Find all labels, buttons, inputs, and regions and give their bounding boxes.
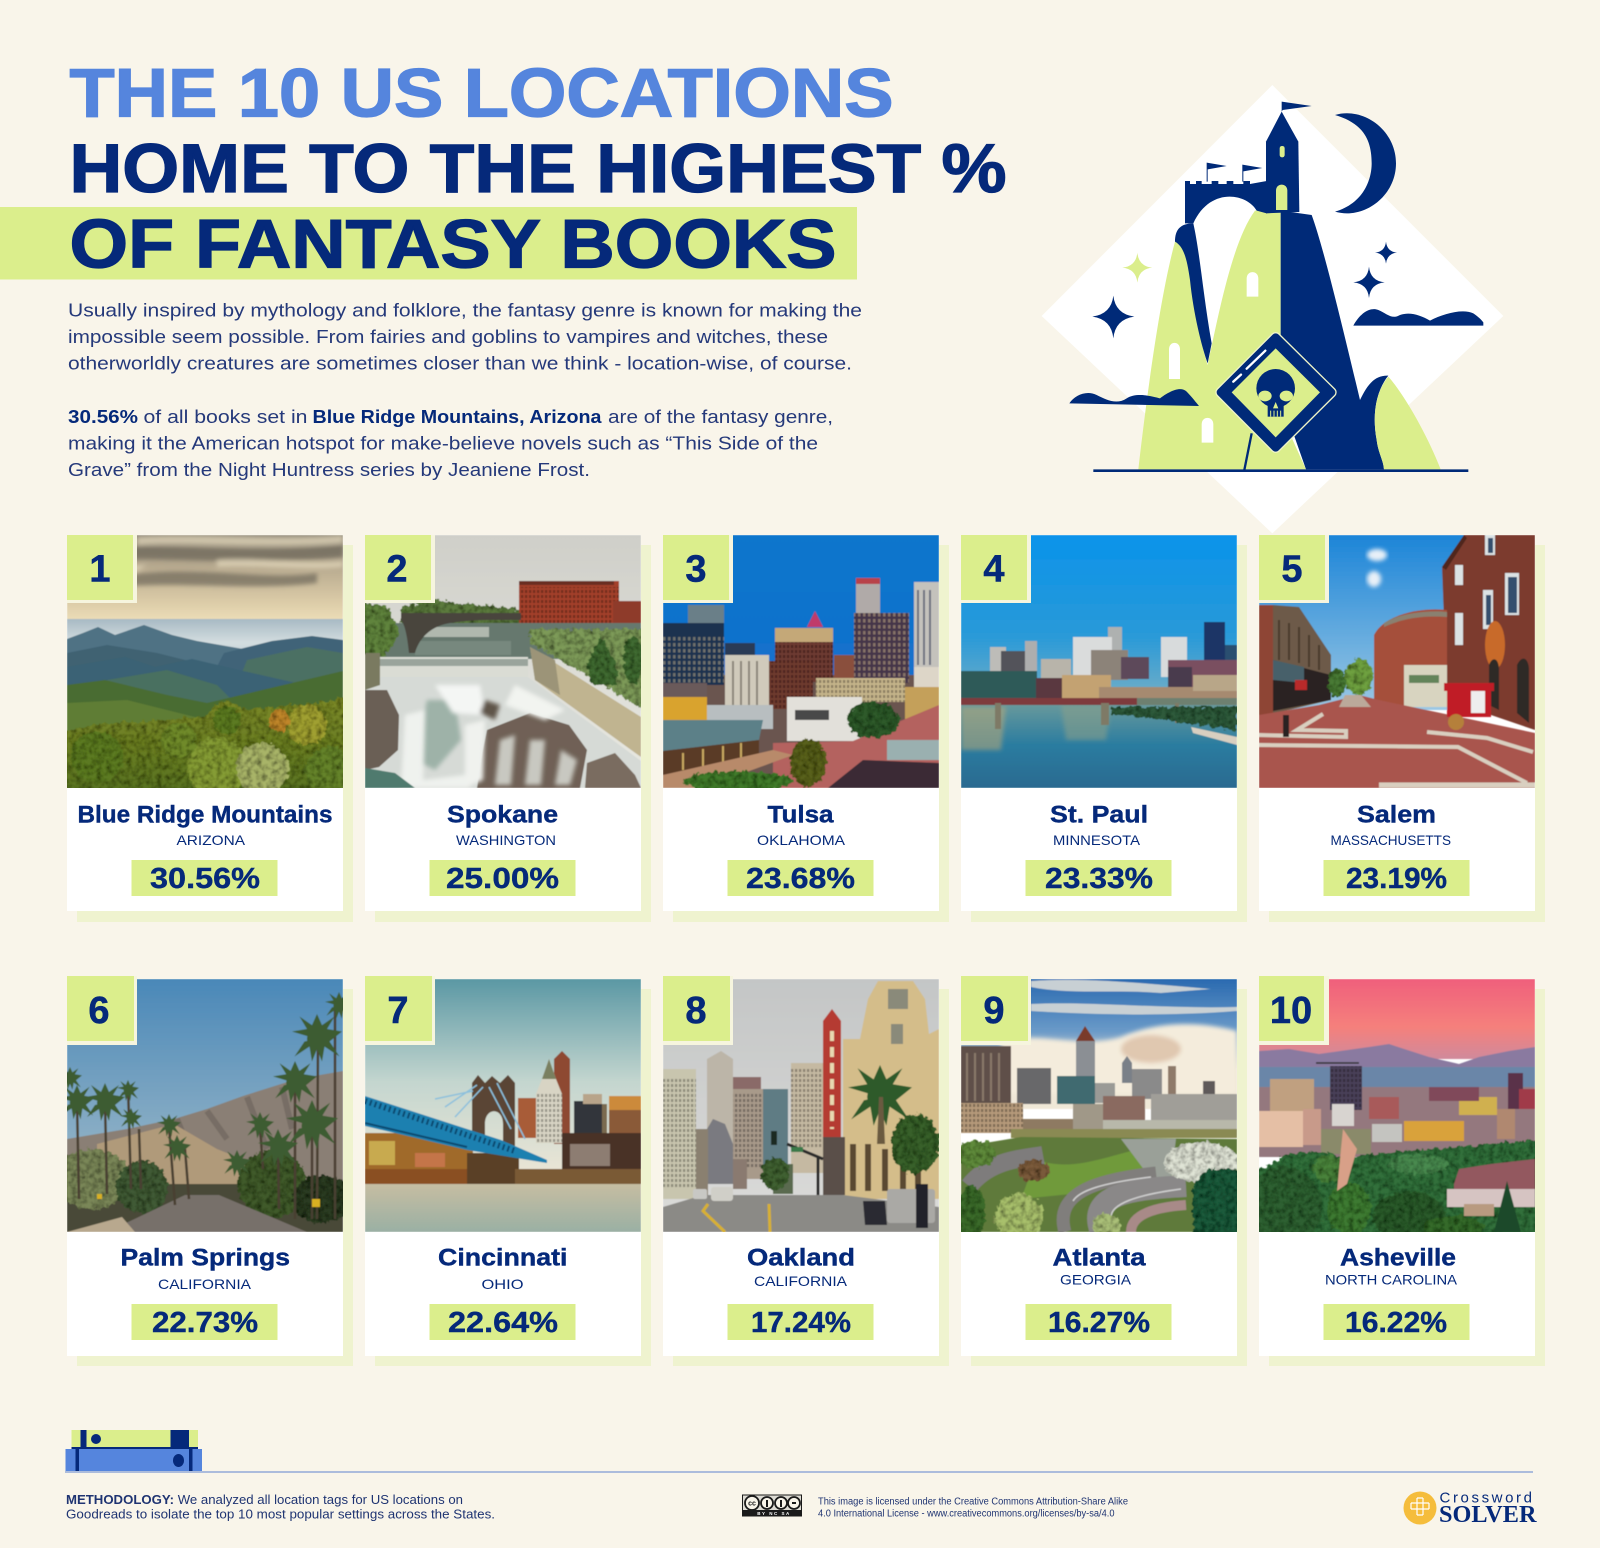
state: WASHINGTON [456,832,556,848]
highlight text [68,406,833,480]
location name: Salem [1357,802,1436,828]
percentage [728,860,874,896]
location name: Asheville [1340,1244,1456,1272]
intro text: impossible seem possible. From fairies and goblins to vampires and witches, these [68,326,828,347]
percentage: 22.73% [152,1307,258,1339]
percentage [132,860,278,896]
logo: Crossword Solver [1404,1490,1537,1528]
percentage: 17.24% [751,1307,851,1339]
location name: Cincinnati [438,1244,568,1272]
rank badge 3: 3 [685,548,707,590]
percentage [1324,860,1470,896]
card 2: Spokane [357,535,651,922]
location name: Atlanta [1052,1244,1146,1272]
rank badge 9 [961,976,1031,1045]
percentage: 22.64% [448,1307,558,1339]
state: CALIFORNIA [158,1276,252,1292]
state: GEORGIA [1060,1272,1132,1288]
rank badge 7 [365,976,435,1045]
rank badge 7: 7 [387,990,409,1032]
card 7: Cincinnati [365,976,651,1366]
percentage [1026,1304,1172,1340]
rank badge 10 [1259,976,1329,1045]
location name: St. Paul [1050,802,1148,828]
methodology note: METHODOLOGY: We analyzed all location tags for US locations on [66,1493,463,1507]
icon: creative commons badge [742,1495,802,1516]
photo: Spokane [365,535,641,788]
highlight text: are of the fantasy genre, [608,406,833,427]
state: ARIZONA [176,832,246,848]
icon: creative commons badge: BY NC SA [757,1511,791,1516]
rank badge 6: 6 [88,990,110,1032]
rank badge 8: 8 [685,990,707,1032]
photo: Salem [1259,535,1535,788]
highlight text: making it the American hotspot for make-believe novels such as “This Side of the [68,432,818,454]
logo: Crossword Solver: SOLVER [1439,1502,1537,1528]
rank badge 1 [67,535,137,603]
card 1: Blue Ridge Mountains [57,535,353,922]
highlight text: Grave” from the Night Huntress series by Jeaniene Frost. [68,459,590,480]
title line 2: HOME TO THE HIGHEST % [70,130,1006,207]
intro text: Usually inspired by mythology and folklore, the fantasy genre is known for making the [68,300,862,320]
location name: Spokane [447,802,558,828]
state: CALIFORNIA [754,1273,848,1289]
location name: Tulsa [768,802,834,828]
percentage: 23.68% [746,863,855,895]
percentage [728,1304,874,1340]
rank badge 3 [663,535,733,603]
title [0,54,1006,282]
percentage: 30.56% [150,863,260,895]
state: OHIO [482,1276,524,1292]
rank badge 1: 1 [89,548,111,590]
state: OKLAHOMA [757,832,846,848]
card 8: Oakland [663,976,949,1366]
photo: Blue Ridge Mountains [67,535,343,788]
title highlight bar [0,207,857,280]
card 9: Atlanta [956,976,1247,1366]
intro text: otherworldly creatures are sometimes closer than we think - location-wise, of course. [68,352,852,374]
percentage: 16.22% [1345,1307,1447,1339]
rank badge 4: 4 [983,548,1005,590]
state: MASSACHUSETTS [1330,832,1451,848]
percentage: 23.33% [1045,863,1153,895]
percentage: 25.00% [446,863,559,895]
card 10: Asheville [1246,976,1545,1366]
percentage [132,1304,278,1340]
percentage [430,1304,576,1340]
rank badge 2 [365,535,435,603]
location name: Palm Springs [120,1244,290,1272]
location name: Blue Ridge Mountains [78,802,332,828]
methodology note: Goodreads to isolate the top 10 most popular settings across the States. [66,1508,495,1522]
state: MINNESOTA [1053,832,1141,848]
rank badge 6 [67,976,137,1045]
illustration: castle on cliff [1042,85,1503,533]
percentage [1026,860,1172,896]
icon: creative commons badge: cc [748,1500,756,1508]
highlight text: of all books set in [144,406,308,427]
license text [818,1496,1128,1520]
license text: 4.0 International License - www.creativecommons.org/licenses/by-sa/4.0 [818,1508,1115,1520]
card 3: Tulsa [663,535,949,922]
rank badge 2: 2 [386,548,408,590]
photo: Palm Springs [67,979,343,1232]
card 5: Salem [1259,535,1545,922]
percentage: 23.19% [1346,863,1447,895]
intro text [68,300,862,374]
photo: Tulsa [663,535,939,788]
rank badge 10: 10 [1270,990,1312,1032]
highlight text: 30.56% [68,406,138,427]
rank badge 5: 5 [1281,548,1303,590]
rank badge 5 [1259,535,1329,603]
state: NORTH CAROLINA [1325,1272,1458,1288]
card 6: Palm Springs [54,976,353,1366]
highlight text: Blue Ridge Mountains, Arizona [312,406,602,427]
photo: Oakland [663,979,939,1232]
methodology note [66,1493,495,1522]
photo: Asheville [1259,979,1535,1232]
title line 3: OF FANTASY BOOKS [70,206,836,282]
rank badge 9: 9 [983,990,1005,1032]
photo: Atlanta [961,979,1237,1232]
percentage: 16.27% [1048,1307,1150,1339]
percentage [430,860,576,896]
location name: Oakland [747,1244,855,1272]
rank badge 8 [663,976,733,1045]
logo: Crossword Solver: Crossword [1440,1490,1532,1506]
title line 1: THE 10 US LOCATIONS [70,54,894,132]
card 4: St. Paul [961,535,1247,922]
icon: stacked books [66,1430,202,1471]
photo: Cincinnati [365,979,641,1232]
license text: This image is licensed under the Creative Commons Attribution-Share Alike [818,1496,1128,1508]
percentage [1324,1304,1470,1340]
rank badge 4 [961,535,1031,603]
photo: St. Paul [961,535,1237,788]
